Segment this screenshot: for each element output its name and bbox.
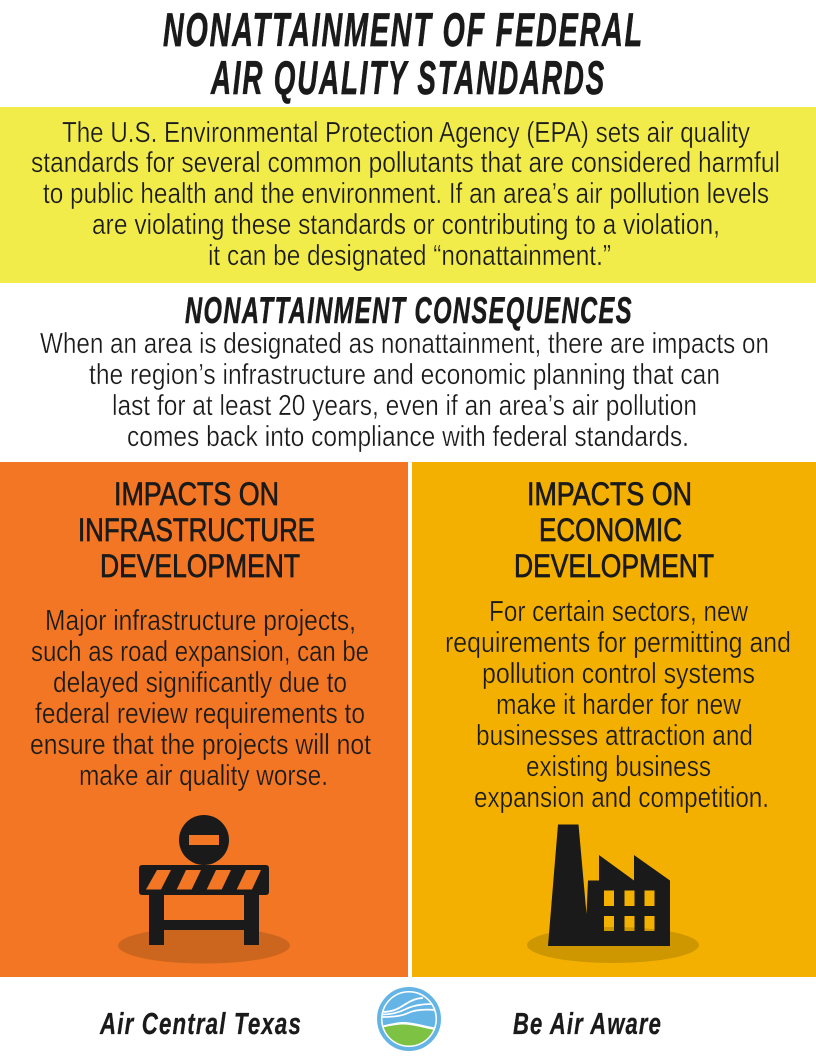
- text block: consequences description: [40, 328, 769, 453]
- heading: economic: ECONOMIC: [539, 512, 682, 548]
- footer text: Be Air Aware: Be Air Aware: [513, 1006, 662, 1041]
- panel: EPA standards intro: [0, 107, 816, 283]
- text block: consequences description: last for at least 20 years, even if an area’s air pollution: [112, 390, 697, 422]
- text block: economic impacts: For certain sectors, new: [489, 596, 748, 628]
- text block: economic impacts: existing business: [526, 751, 711, 783]
- title: [163, 3, 644, 104]
- text block: economic impacts: pollution control systems: [482, 658, 755, 690]
- text block: infrastructure impacts: [30, 605, 371, 792]
- footer text: Air Central Texas: Air Central Texas: [99, 1006, 302, 1041]
- text block: economic impacts: [445, 596, 791, 814]
- text block: infrastructure impacts: ensure that the projects will not: [30, 729, 371, 761]
- text block: infrastructure impacts: Major infrastructure projects,: [45, 605, 356, 637]
- text block: infrastructure impacts: such as road expansion, can be: [31, 636, 369, 668]
- text block: infrastructure impacts: delayed significantly due to: [53, 667, 347, 699]
- heading: economic: DEVELOPMENT: [514, 548, 714, 584]
- icon: road barrier: [118, 815, 290, 964]
- heading: infrastructure: DEVELOPMENT: [100, 548, 300, 584]
- panel: impacts on economic development: [412, 462, 816, 977]
- heading: economic: [514, 476, 714, 584]
- text block: infrastructure impacts: federal review requirements to: [35, 698, 365, 730]
- icon: factory: [527, 824, 699, 963]
- text block: infrastructure impacts: make air quality worse.: [79, 760, 328, 792]
- heading: infrastructure: [78, 476, 315, 584]
- text block: economic impacts: expansion and competition.: [474, 782, 769, 814]
- heading: infrastructure: IMPACTS ON: [114, 476, 279, 512]
- text block: consequences description: the region’s infrastructure and economic planning that can: [89, 359, 720, 391]
- text block: consequences description: comes back into compliance with federal standards.: [127, 421, 689, 453]
- panel: EPA standards intro: it can be designated “nonattainment.”: [208, 240, 611, 272]
- panel: impacts on infrastructure development: [0, 462, 408, 977]
- heading: infrastructure: INFRASTRUCTURE: [78, 512, 315, 548]
- logo: air and land emblem: [379, 989, 440, 1050]
- text block: economic impacts: make it harder for new: [496, 689, 741, 721]
- text block: economic impacts: businesses attraction and: [476, 720, 753, 752]
- panel: EPA standards intro: are violating these standards or contributing to a violation,: [92, 209, 720, 241]
- heading: economic: IMPACTS ON: [527, 476, 692, 512]
